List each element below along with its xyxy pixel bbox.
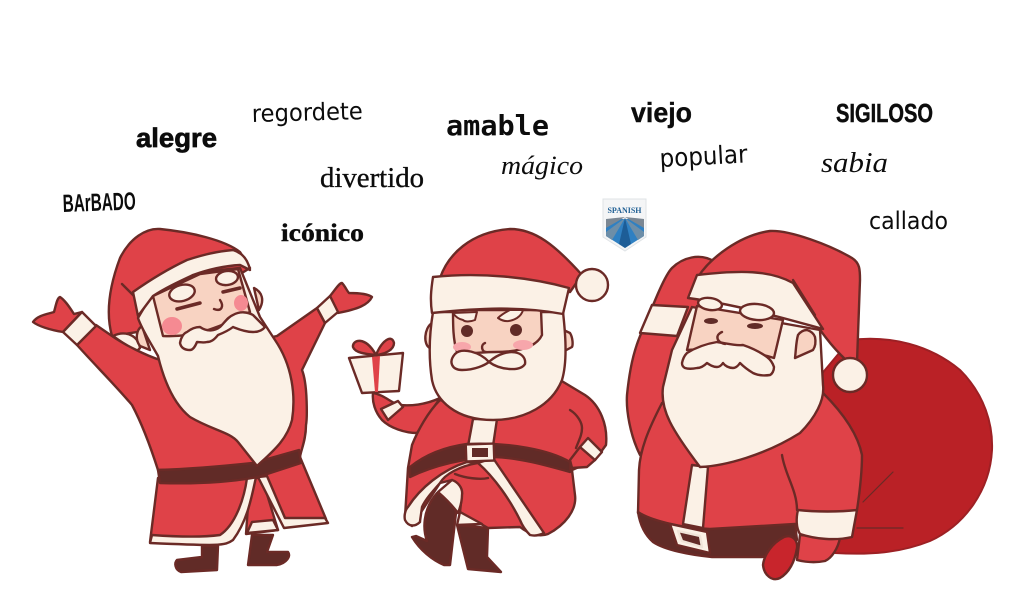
nose [717,332,725,344]
word: BArBADO: BArBADO [62,187,136,218]
glasses right [739,303,775,321]
hat brim [688,272,823,329]
gift bow [353,339,394,355]
moustache [180,312,265,350]
belt [410,444,570,477]
word: viejo: viejo [631,97,692,128]
left cheek [453,342,471,352]
chest placket [468,419,497,446]
forearm [797,535,840,562]
inner skirt [246,478,278,534]
right ear [557,327,573,355]
illustration: Santa with sack [627,231,992,579]
sack fold lines [857,472,903,528]
hat brim [133,250,250,316]
closed eyes [177,288,240,309]
left ear [137,326,150,350]
left eye [461,325,473,337]
back arm [627,257,715,455]
hat fold [122,284,134,296]
arm [373,393,440,433]
pompom [113,333,140,352]
logo: Spanish academy shield [603,199,646,251]
word: callado: callado [869,207,948,235]
word: sabia: sabia [821,147,888,179]
beard [430,312,566,420]
gift ribbon [372,356,380,392]
right cheek [234,295,248,311]
body [638,393,862,530]
word: mágico: mágico [501,151,583,180]
chest placket [683,465,708,528]
buckle [466,444,494,461]
left cuff [63,312,96,345]
boot front [457,525,501,572]
word: SIGILOSO: SIGILOSO [836,98,933,128]
hat fold [793,280,815,315]
right cheek [513,340,533,350]
buckle centre [472,448,488,457]
right boot [248,535,289,565]
nose [482,343,486,352]
hip cuff [580,438,602,460]
hat [440,229,582,292]
knee cuff [438,480,462,513]
gift box [349,353,403,393]
arm cuff [381,401,403,420]
word: alegre: alegre [136,123,217,153]
right skirt panel [262,457,326,522]
logo: Spanish academy shield: SPANISH [608,206,642,215]
inner skirt shade [455,474,488,479]
moustache [451,351,525,370]
word: amable: amable [446,109,549,142]
hat [698,231,860,362]
left skirt panel [150,476,250,542]
word: regordete: regordete [251,97,363,128]
word: popular: popular [659,139,749,173]
pompom [576,269,608,301]
left ear [425,323,432,348]
face skin [687,306,783,358]
belt [638,512,797,557]
belt [158,450,301,483]
coat torso and arms [77,308,325,470]
boot trim [457,512,482,525]
hat [109,229,250,336]
buckle centre [678,531,702,547]
pompom [833,358,867,392]
right mitten [330,283,372,313]
right eye [747,323,763,329]
mitten [763,536,797,579]
glasses left [697,296,723,312]
hat brim [431,275,569,314]
right cuff [317,296,338,323]
ear [795,330,815,358]
nose [214,300,222,310]
beard and hair [138,268,293,466]
sack [800,339,992,554]
beard [663,307,823,467]
inner hem [247,520,278,533]
hand [570,447,595,468]
left eye [704,318,718,324]
moustache [682,342,774,375]
glasses left [167,282,197,304]
face skin [453,310,542,353]
right brow [498,310,523,321]
illustration: Santa with raised arms [33,229,372,572]
left mitten [33,297,82,332]
front cuff [797,510,857,539]
right ear [254,288,262,310]
boot back [412,493,456,565]
right coat trim [478,458,544,536]
glasses right [215,270,239,286]
left brow [453,312,477,322]
left hem trim [150,477,256,545]
word: divertido: divertido [320,162,424,194]
left boot [175,546,218,572]
body [405,380,606,535]
buckle [670,524,710,553]
right hem trim [258,476,328,528]
illustration: Santa with gift [349,229,608,572]
arm line [782,455,797,510]
left coat trim [405,462,478,526]
coat arm line [570,410,582,448]
right eye [510,324,522,336]
left cheek [162,317,182,335]
raised cuff [640,305,688,336]
face skin [153,269,250,336]
word: icónico: icónico [281,220,364,247]
